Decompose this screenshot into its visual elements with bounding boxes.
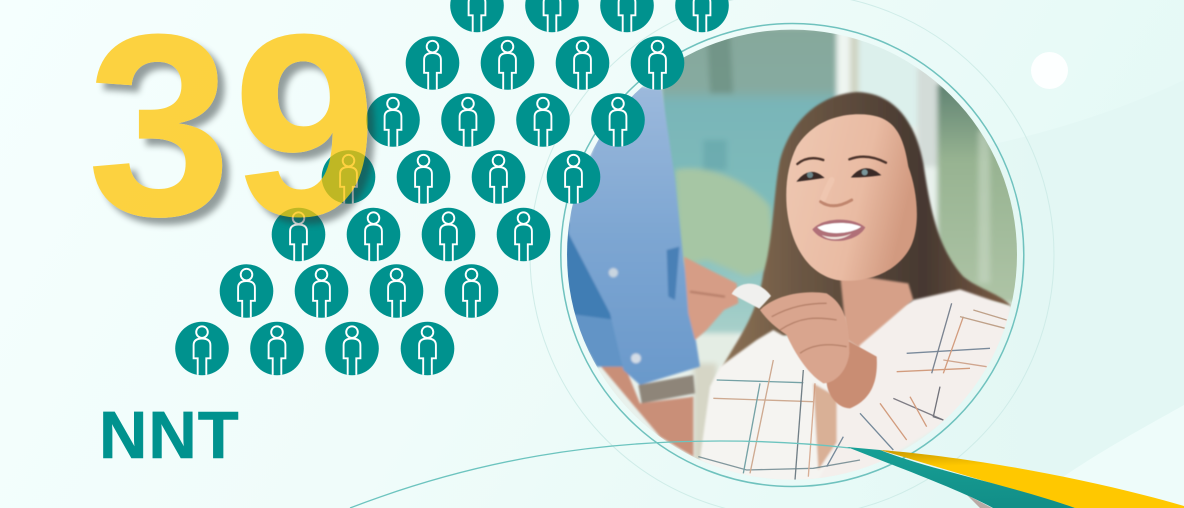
swoosh	[847, 447, 1184, 508]
people grid: 28 icons	[175, 0, 729, 375]
thin curve	[350, 441, 850, 508]
window background	[598, 30, 1017, 462]
blouse plaid lines	[698, 303, 1007, 480]
photo ring	[561, 24, 1024, 486]
white dot	[1031, 52, 1068, 89]
woman: blouse	[697, 289, 1010, 483]
woman: face	[786, 114, 917, 281]
woman: eyes and brows	[797, 157, 886, 206]
adhesive patch	[732, 284, 771, 309]
woman: neck	[840, 273, 913, 348]
woman: hair	[719, 92, 1012, 383]
woman: smile	[812, 220, 865, 241]
photo: woman receiving a patch from a man	[560, 20, 1027, 487]
man: arm and shirt	[565, 86, 738, 457]
label: NNT: NNT	[99, 398, 240, 473]
woman: arm and hand	[760, 292, 877, 408]
